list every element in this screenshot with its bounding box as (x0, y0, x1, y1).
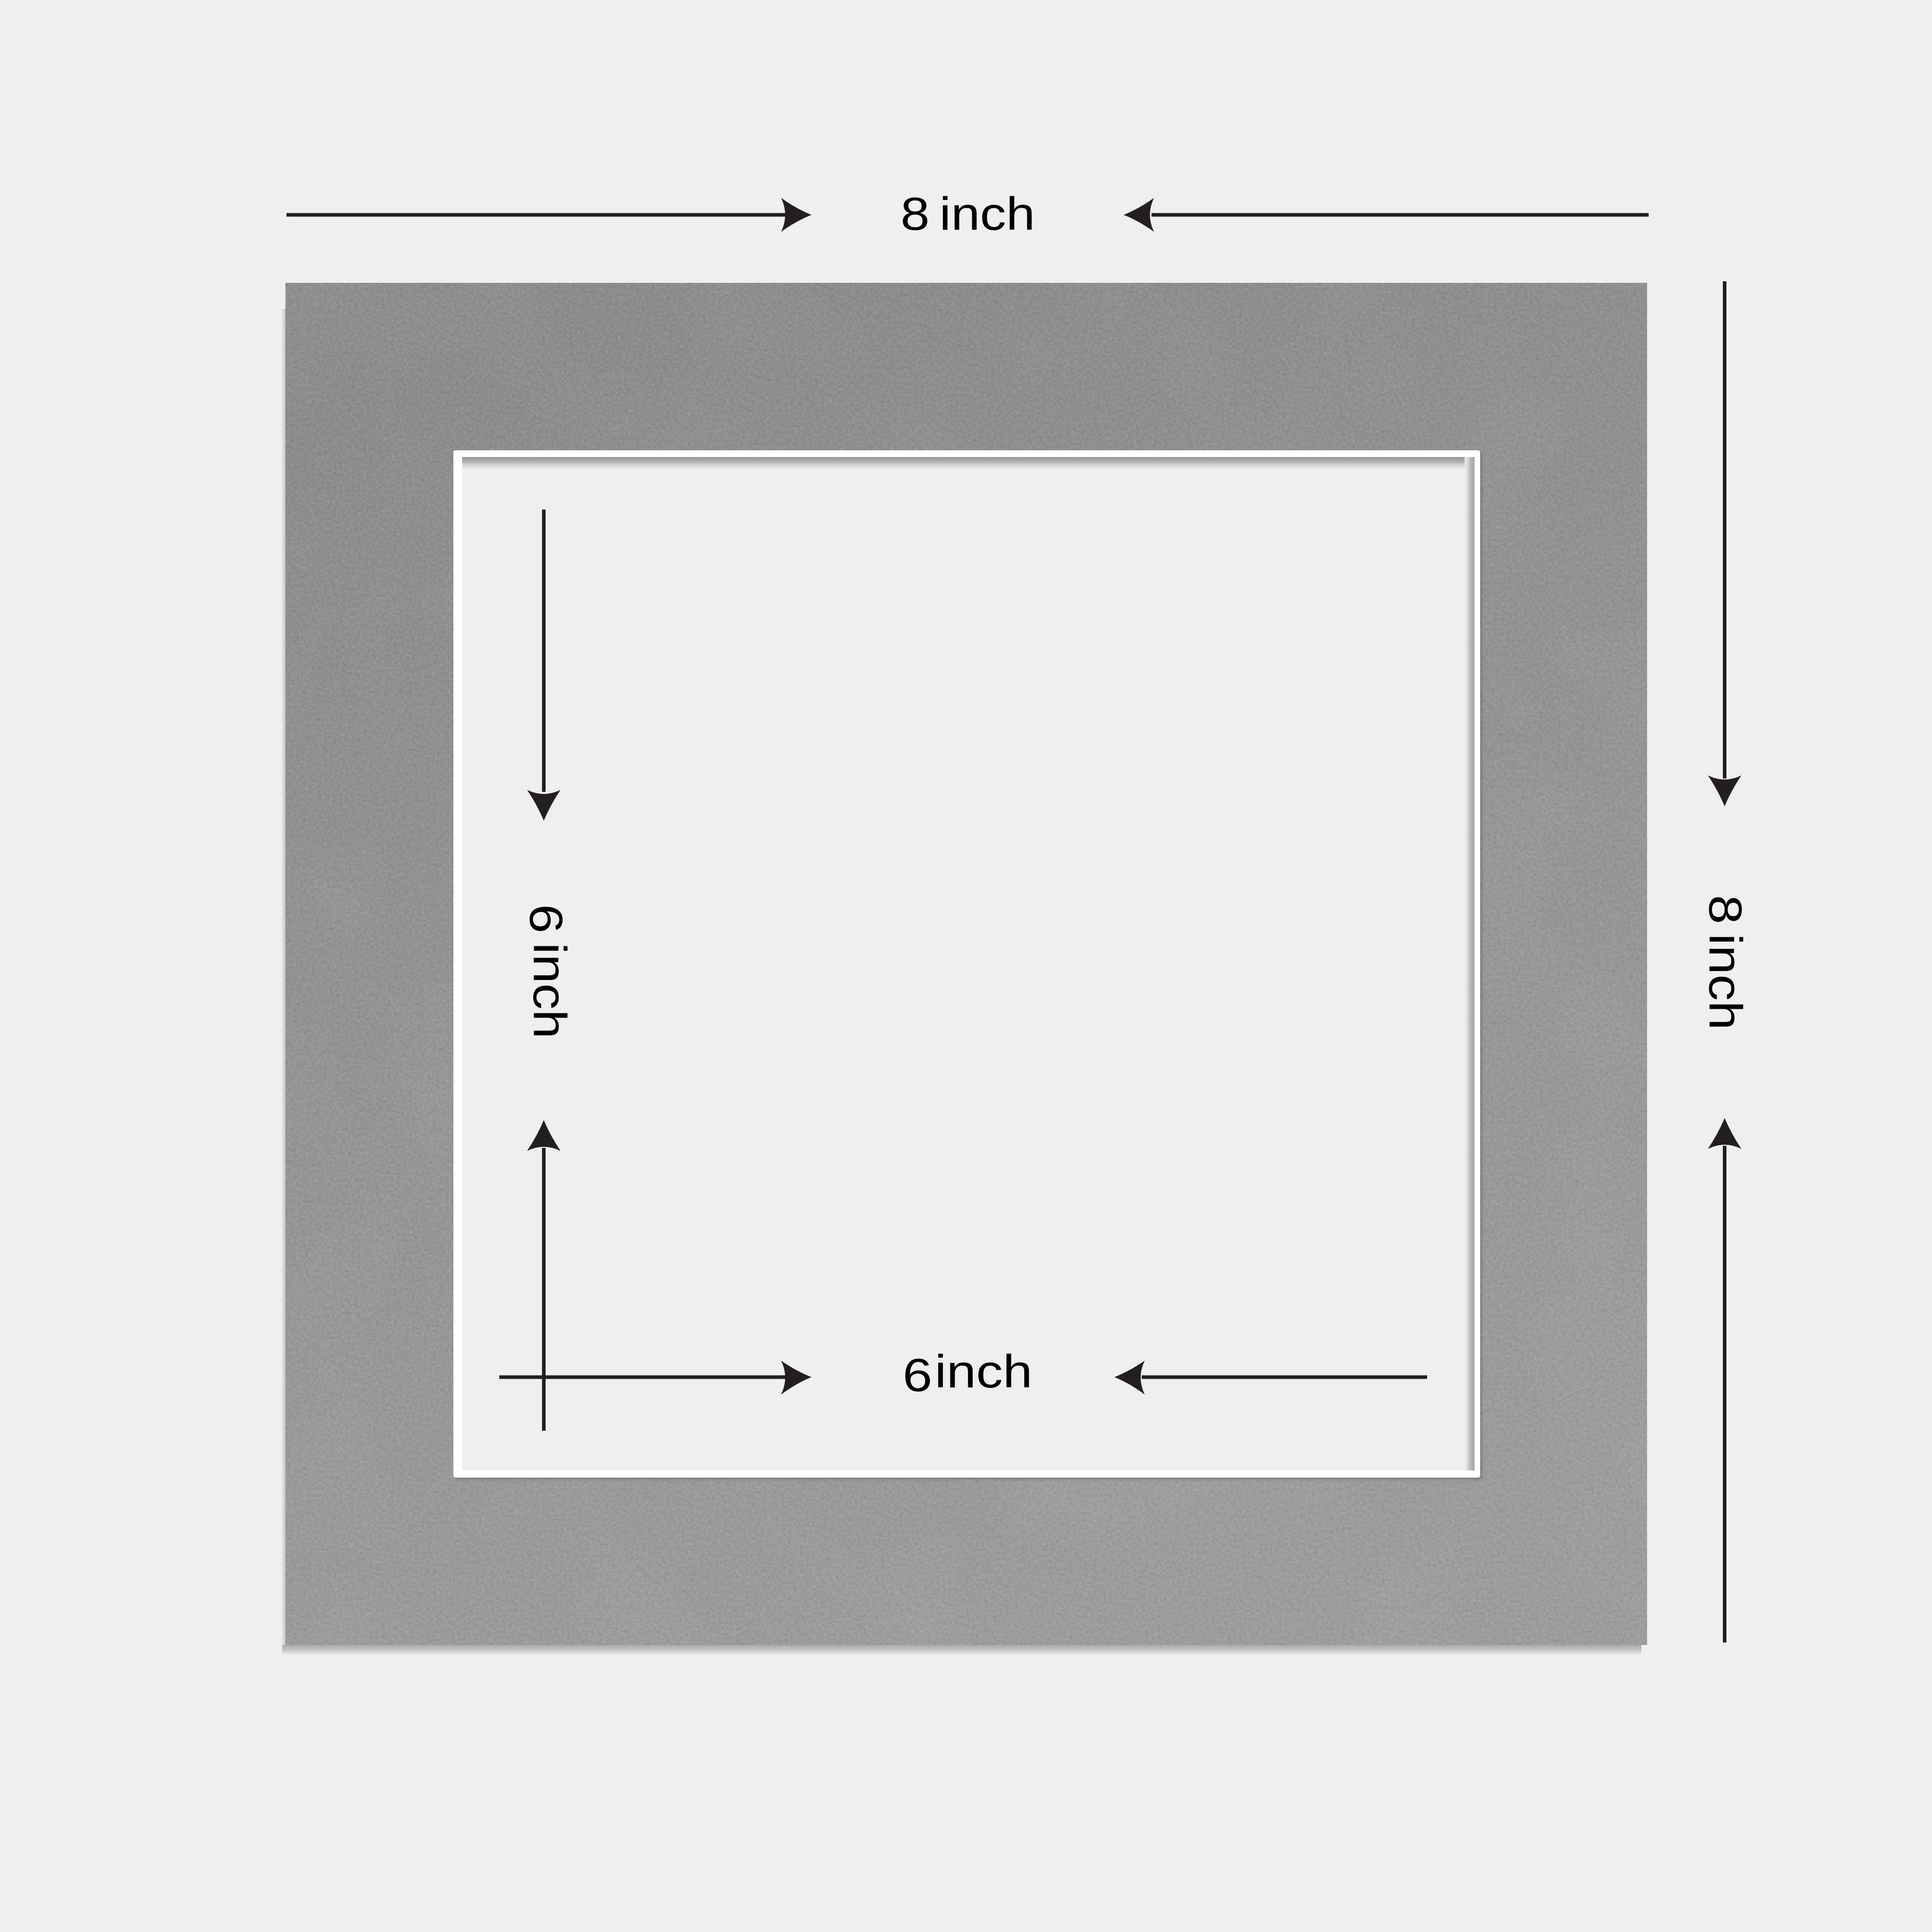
arrow: top width, pointing right (286, 198, 811, 232)
arrow: right height, pointing down (1708, 281, 1741, 806)
arrow: inner width, pointing right (499, 1361, 811, 1395)
arrow: inner height, pointing down (527, 510, 561, 821)
window opening with white bevel (453, 450, 1482, 1479)
label: opening height 6 inch: 6 inch (520, 904, 575, 1039)
mat board with shadow (281, 283, 1647, 1655)
arrow: top width, pointing left (1124, 198, 1649, 232)
label: outer width 8 inch: 8 inch (901, 188, 1035, 240)
label: outer height 8 inch: 8 inch (1699, 895, 1751, 1030)
arrow: right height, pointing up (1708, 1118, 1741, 1642)
arrow: inner width, pointing left (1114, 1361, 1427, 1395)
label: opening width 6 inch: 6 inch (903, 1345, 1032, 1401)
arrow: inner height, pointing up (527, 1120, 561, 1431)
